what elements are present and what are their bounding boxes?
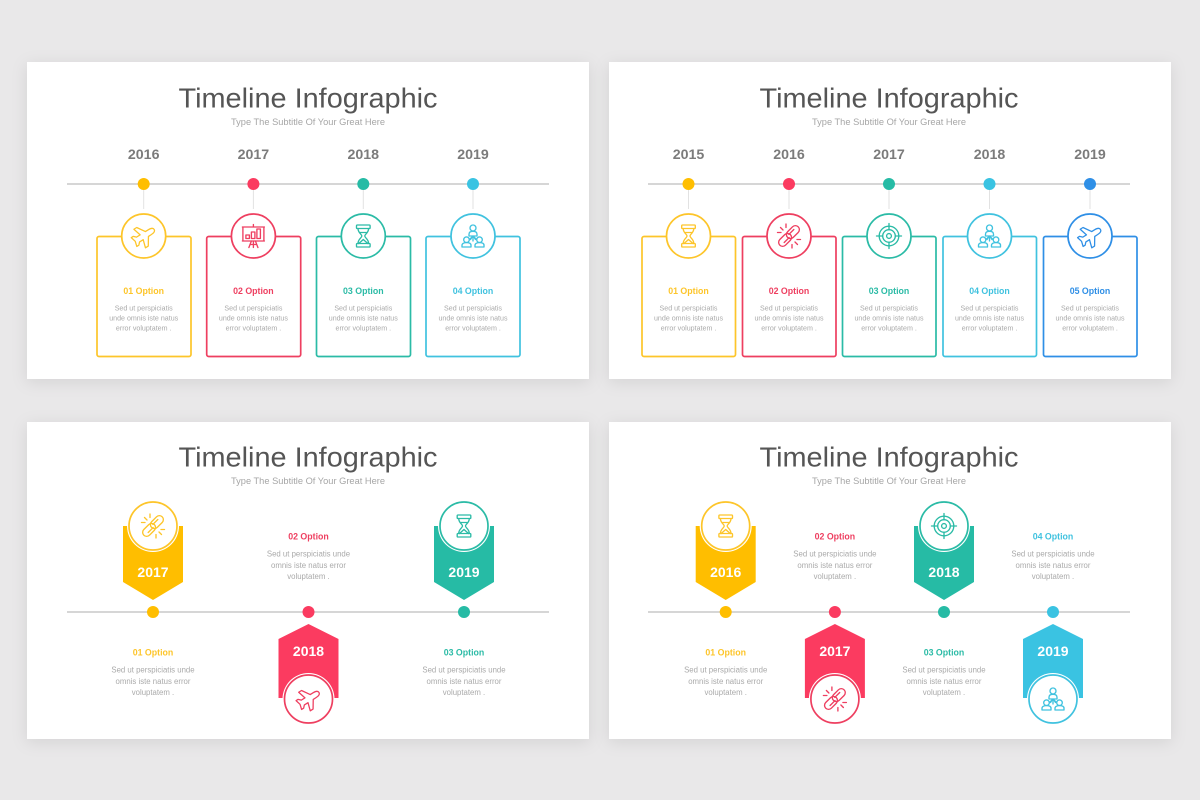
milestone 2018: 2018 [293, 643, 324, 659]
milestone 2017: 03 Option [869, 286, 909, 296]
milestone 2018: voluptatem . [923, 688, 965, 697]
milestone 2019: omnis iste natus error [1016, 561, 1091, 570]
milestone 2015: error voluptatem . [661, 324, 716, 332]
milestone 2017: unde omnis iste natus [219, 314, 288, 322]
milestone 2017 [842, 147, 936, 356]
milestone 2016: omnis iste natus error [688, 677, 764, 686]
milestone 2018: error voluptatem . [336, 324, 391, 332]
milestone 2016: 01 Option [123, 286, 164, 296]
milestone 2019: unde omnis iste natus [438, 314, 508, 322]
milestone 2017: error voluptatem . [226, 324, 281, 332]
milestone 2019 [1011, 532, 1095, 725]
milestone 2017: unde omnis iste natus [854, 314, 924, 322]
milestone 2018: Sed ut perspiciatis [961, 304, 1019, 312]
subtitle: Type The Subtitle Of Your Great Here [812, 476, 966, 487]
milestone 2019: 05 Option [1070, 286, 1110, 296]
panel: bottom-right timeline, four years [609, 422, 1171, 739]
milestone 2017 [111, 500, 195, 697]
milestone 2016: unde omnis iste natus [754, 314, 824, 322]
milestone 2017: omnis iste natus error [797, 561, 873, 570]
milestone 2015: Sed ut perspiciatis [660, 304, 718, 312]
panel: bottom-left timeline, three years [27, 422, 589, 739]
milestone 2015: unde omnis iste natus [654, 314, 723, 322]
milestone 2015: 2015 [673, 147, 704, 163]
milestone 2018: 04 Option [969, 286, 1010, 296]
milestone 2019: error voluptatem . [1062, 324, 1118, 332]
milestone 2017 [207, 147, 301, 356]
milestone 2019 [1044, 147, 1137, 356]
milestone 2018: unde omnis iste natus [955, 314, 1024, 322]
milestone 2016 [684, 500, 767, 697]
milestone 2016: Sed ut perspiciatis unde [684, 666, 767, 674]
milestone 2016: 2016 [710, 564, 741, 580]
milestone 2019: 2019 [1074, 147, 1106, 163]
milestone 2017 [793, 532, 877, 725]
title: Timeline Infographic [760, 442, 1018, 472]
milestone 2016 [97, 147, 191, 356]
milestone 2015: 01 Option [668, 286, 709, 296]
milestone 2019: 04 Option [1033, 532, 1073, 542]
title: Timeline Infographic [178, 442, 438, 472]
milestone 2018: omnis iste natus error [907, 677, 982, 686]
milestone 2016: unde omnis iste natus [109, 314, 179, 322]
milestone 2018: voluptatem . [287, 572, 330, 581]
milestone 2019: 2019 [457, 147, 489, 163]
milestone 2016: 02 Option [769, 286, 809, 296]
timeline axis [648, 183, 1130, 185]
milestone 2017: Sed ut perspiciatis unde [793, 550, 877, 558]
milestone 2017: Sed ut perspiciatis [860, 304, 918, 312]
milestone 2018: 02 Option [288, 532, 329, 542]
milestone 2018: 2018 [974, 147, 1005, 163]
panel: top-right timeline, five years [609, 62, 1171, 379]
milestone 2016: Sed ut perspiciatis [760, 304, 818, 312]
milestone 2019: voluptatem . [1032, 572, 1074, 581]
milestone 2019: error voluptatem . [445, 324, 501, 332]
milestone 2016: voluptatem . [704, 688, 747, 697]
milestone 2018 [902, 500, 986, 697]
milestone 2016 [742, 147, 836, 356]
milestone 2016: error voluptatem . [116, 324, 172, 332]
milestone 2018: Sed ut perspiciatis unde [902, 666, 986, 674]
milestone 2016: Sed ut perspiciatis [115, 304, 173, 312]
milestone 2018: error voluptatem . [962, 324, 1017, 332]
milestone 2018: 03 Option [924, 648, 964, 658]
subtitle: Type The Subtitle Of Your Great Here [812, 117, 966, 128]
title: Timeline Infographic [760, 82, 1018, 114]
milestone 2018 [267, 532, 350, 725]
milestone 2019: Sed ut perspiciatis unde [1011, 550, 1095, 558]
milestone 2019: Sed ut perspiciatis [1061, 304, 1119, 312]
milestone 2017: 2017 [819, 643, 851, 659]
milestone 2019: unde omnis iste natus [1055, 314, 1125, 322]
panel: top-left timeline, four years [27, 62, 589, 379]
milestone 2017: 02 Option [233, 286, 274, 296]
milestone 2018: 2018 [348, 147, 379, 163]
milestone 2018: unde omnis iste natus [329, 314, 398, 322]
milestone 2019: 04 Option [453, 286, 493, 296]
milestone 2017: 2017 [238, 147, 269, 163]
subtitle: Type The Subtitle Of Your Great Here [231, 476, 385, 487]
milestone 2016: error voluptatem . [761, 324, 817, 332]
milestone 2019 [426, 147, 520, 356]
milestone 2018 [943, 147, 1036, 356]
milestone 2019: 03 Option [444, 648, 484, 658]
timeline axis [67, 183, 549, 185]
milestone 2017: Sed ut perspiciatis unde [111, 666, 195, 674]
milestone 2017: error voluptatem . [861, 324, 917, 332]
milestone 2016: 2016 [128, 147, 160, 163]
milestone 2017: voluptatem . [132, 688, 174, 697]
milestone 2018: Sed ut perspiciatis [334, 304, 393, 312]
title: Timeline Infographic [178, 82, 438, 114]
milestone 2018 [316, 147, 410, 356]
timeline axis [648, 611, 1130, 613]
milestone 2017: omnis iste natus error [116, 677, 191, 686]
subtitle: Type The Subtitle Of Your Great Here [231, 117, 385, 128]
milestone 2019: 2019 [1037, 643, 1069, 659]
milestone 2017: 2017 [873, 147, 905, 163]
milestone 2019: voluptatem . [443, 688, 485, 697]
milestone 2019: omnis iste natus error [427, 677, 502, 686]
timeline axis [67, 611, 549, 613]
milestone 2018: 2018 [928, 564, 960, 580]
milestone 2019: Sed ut perspiciatis [444, 304, 502, 312]
milestone 2015 [642, 147, 736, 356]
milestone 2018: Sed ut perspiciatis unde [267, 550, 350, 558]
milestone 2016: 01 Option [705, 648, 746, 658]
milestone 2017: voluptatem . [814, 572, 856, 581]
milestone 2017: 2017 [137, 564, 169, 580]
milestone 2018: omnis iste natus error [271, 561, 346, 570]
milestone 2017: 01 Option [133, 648, 173, 658]
milestone 2016: 2016 [773, 147, 805, 163]
milestone 2019: Sed ut perspiciatis unde [422, 666, 506, 674]
milestone 2017: 02 Option [815, 532, 855, 542]
milestone 2019: 2019 [448, 564, 480, 580]
milestone 2018: 03 Option [343, 286, 384, 296]
milestone 2017: Sed ut perspiciatis [224, 304, 283, 312]
milestone 2019 [422, 500, 506, 697]
